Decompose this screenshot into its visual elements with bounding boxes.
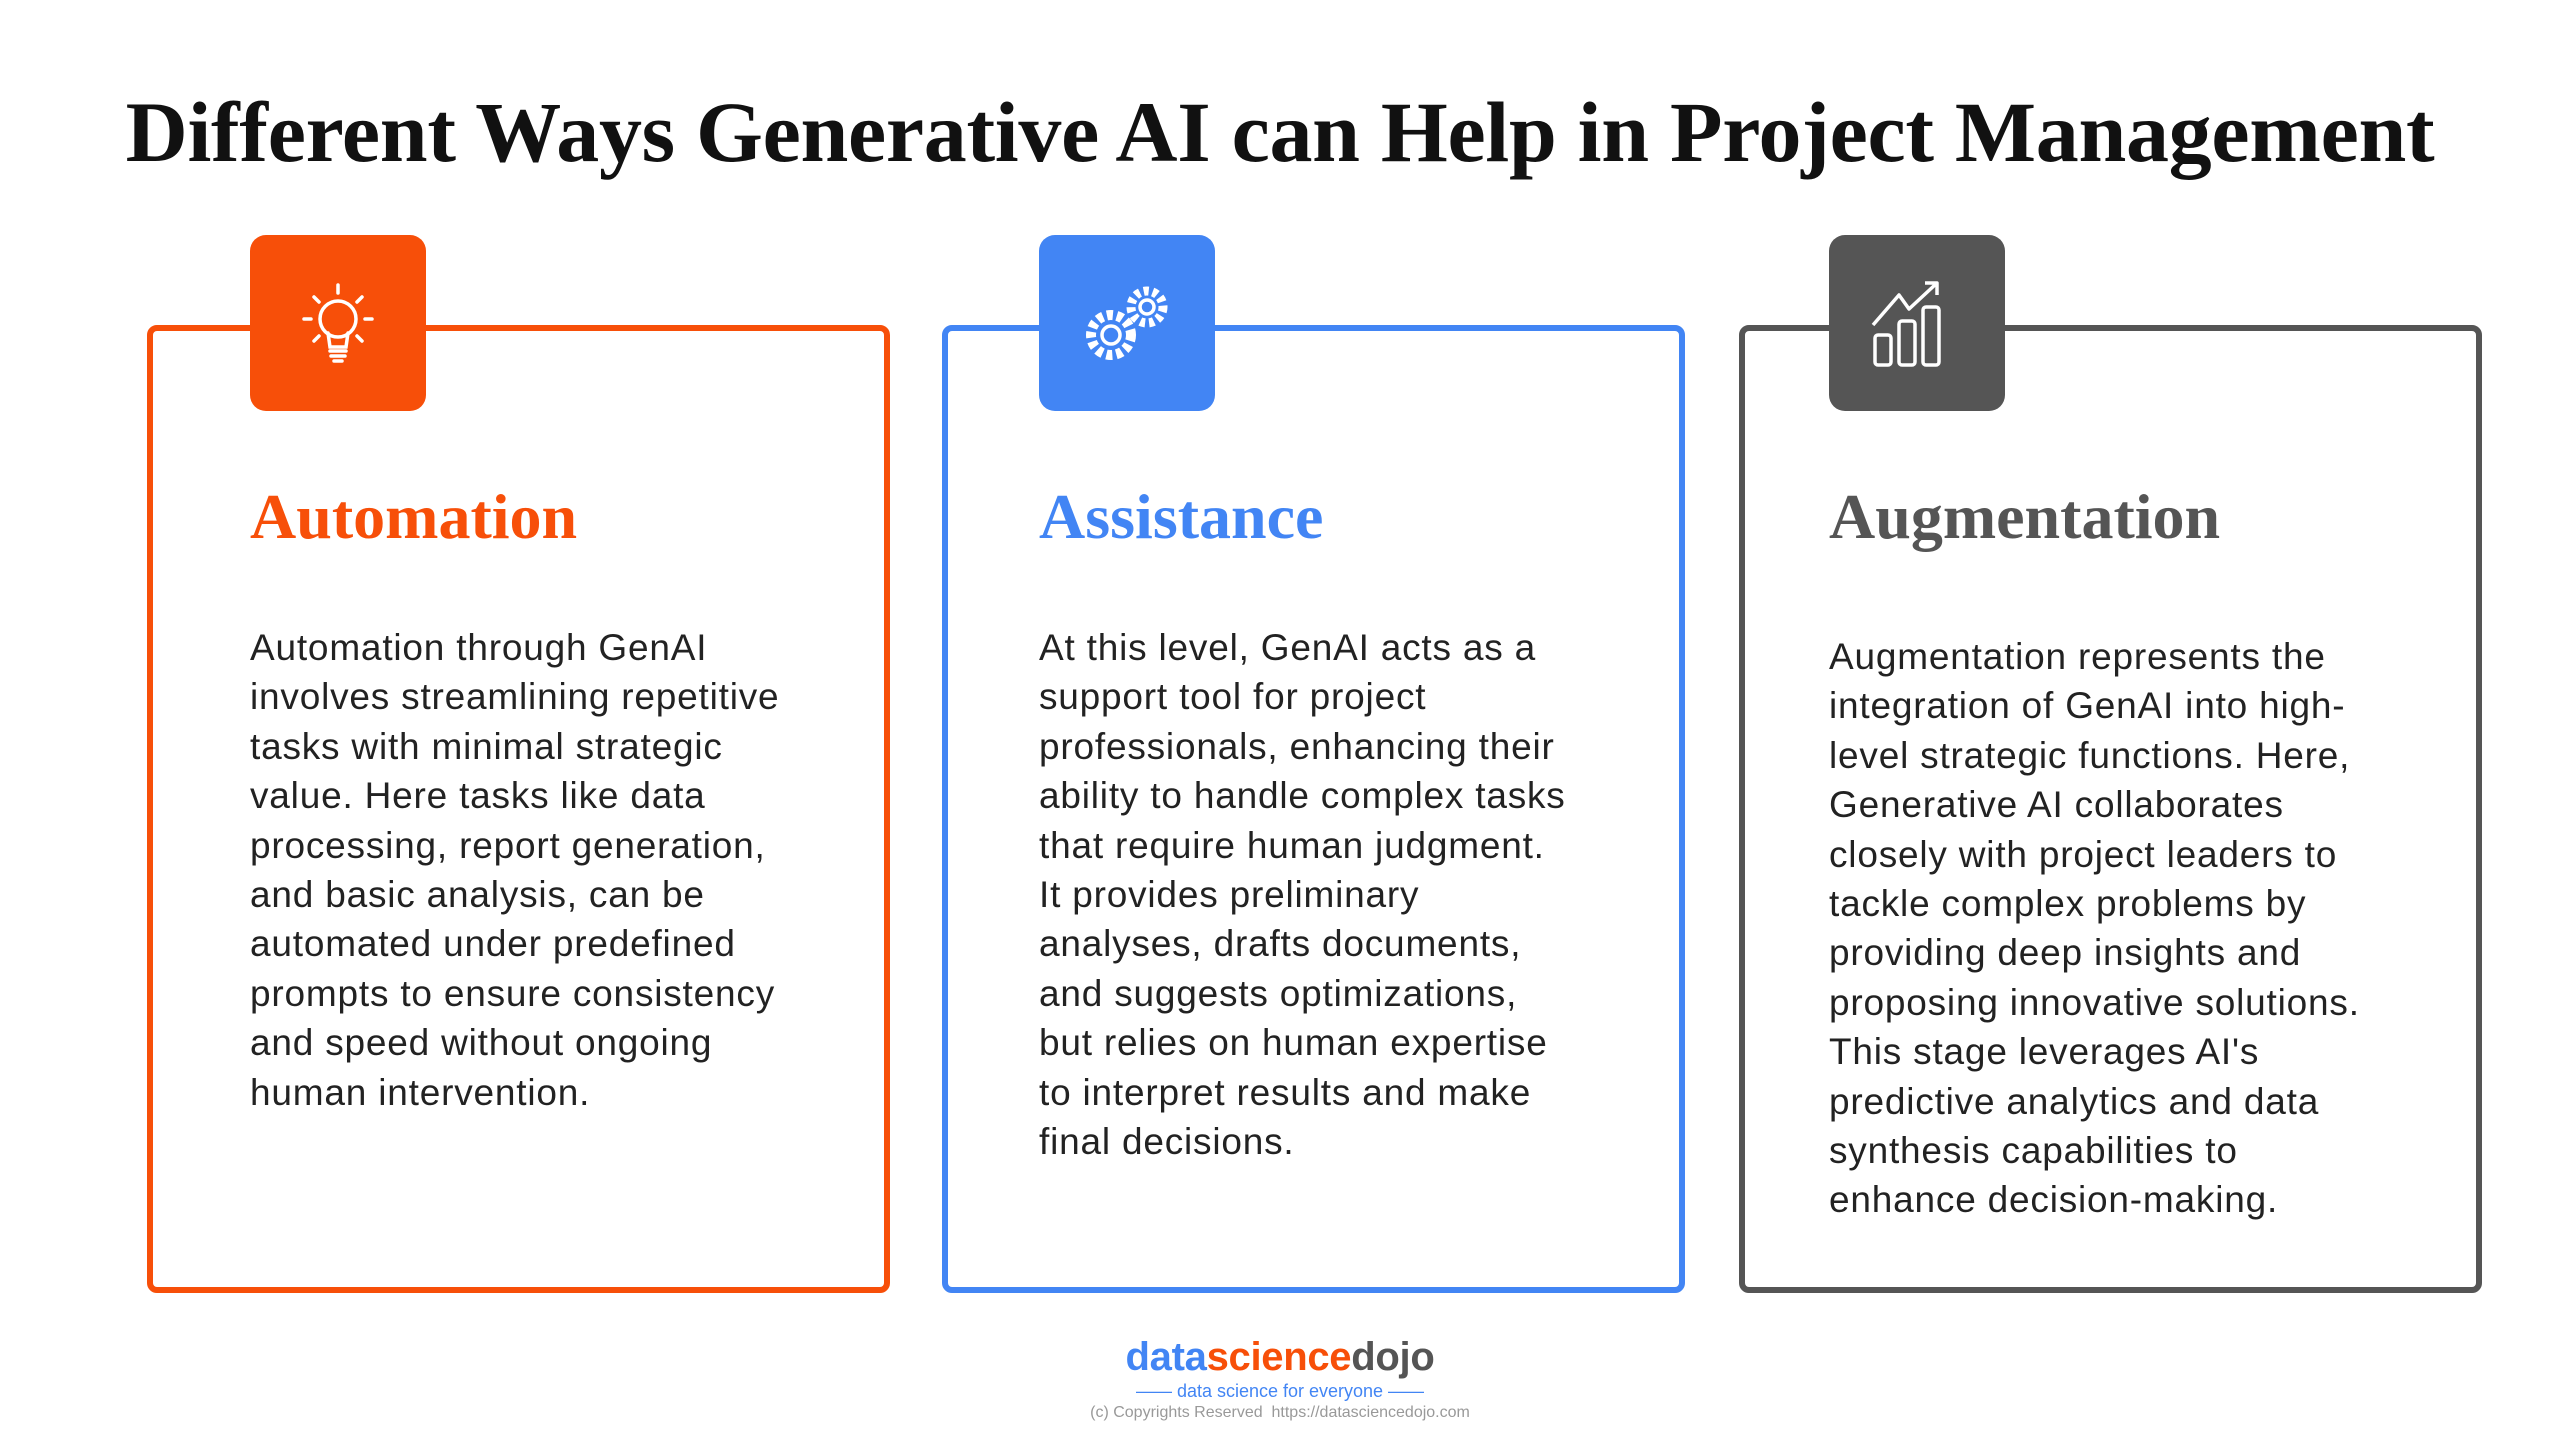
text: automation body [250, 627, 779, 1113]
text: assistance body: ability to handle complex tasks [1039, 775, 1566, 816]
text: augmentation body: level strategic functions. Here, [1829, 735, 2350, 776]
text: augmentation body: This stage leverages AI's [1829, 1031, 2259, 1072]
text: automation body: automated under predefined [250, 923, 736, 964]
icon: bar chart [1829, 235, 2005, 411]
logo [1090, 1335, 1470, 1421]
heading: Assistance: Assistance [1039, 481, 1323, 552]
text: assistance body: analyses, drafts documents, [1039, 923, 1521, 964]
text: assistance body: that require human judgment. [1039, 825, 1545, 866]
logo: —— data science for everyone —— [1136, 1381, 1424, 1401]
text: augmentation body: integration of GenAI into high- [1829, 685, 2345, 726]
text: assistance body [1039, 627, 1566, 1162]
text: automation body: prompts to ensure consistency [250, 973, 775, 1014]
text: automation body: processing, report generation, [250, 825, 766, 866]
text: automation body: human intervention. [250, 1072, 590, 1113]
text: augmentation body: closely with project leaders to [1829, 834, 2337, 875]
heading: Automation: Automation [250, 481, 577, 552]
text: assistance body: At this level, GenAI acts as a [1039, 627, 1536, 668]
text: assistance body: and suggests optimizations, [1039, 973, 1517, 1014]
text: automation body: involves streamlining repetitive [250, 676, 779, 717]
logo: datasciencedojo [1126, 1335, 1434, 1379]
text: automation body: tasks with minimal strategic [250, 726, 723, 767]
text: automation body: Automation through GenAI [250, 627, 707, 668]
text: assistance body: but relies on human expertise [1039, 1022, 1548, 1063]
text: augmentation body [1829, 636, 2360, 1220]
text: assistance body: to interpret results and make [1039, 1072, 1531, 1113]
panel: assistance [942, 325, 1685, 1293]
logo: (c) Copyrights Reserved https://datasciencedojo.com [1090, 1404, 1470, 1421]
text: assistance body: final decisions. [1039, 1121, 1294, 1162]
icon: lightbulb [250, 235, 426, 411]
text: automation body: and basic analysis, can be [250, 874, 705, 915]
text: automation body: value. Here tasks like data [250, 775, 706, 816]
text: assistance body: It provides preliminary [1039, 874, 1419, 915]
text: augmentation body: proposing innovative solutions. [1829, 982, 2360, 1023]
panel: augmentation [1739, 325, 2482, 1293]
text: augmentation body: synthesis capabilities to [1829, 1130, 2238, 1171]
text: augmentation body: enhance decision-making. [1829, 1179, 2278, 1220]
text: augmentation body: providing deep insights and [1829, 932, 2301, 973]
panel: automation [147, 325, 890, 1293]
text: augmentation body: Augmentation represents the [1829, 636, 2326, 677]
text: augmentation body: predictive analytics and data [1829, 1081, 2319, 1122]
icon: gears [1039, 235, 1215, 411]
text: assistance body: professionals, enhancing their [1039, 726, 1555, 767]
title: Different Ways Generative AI can Help in Project Management [126, 84, 2434, 180]
heading: Augmentation: Augmentation [1829, 481, 2220, 552]
text: augmentation body: tackle complex problems by [1829, 883, 2306, 924]
text: augmentation body: Generative AI collaborates [1829, 784, 2284, 825]
text: assistance body: support tool for project [1039, 676, 1426, 717]
text: automation body: and speed without ongoing [250, 1022, 712, 1063]
